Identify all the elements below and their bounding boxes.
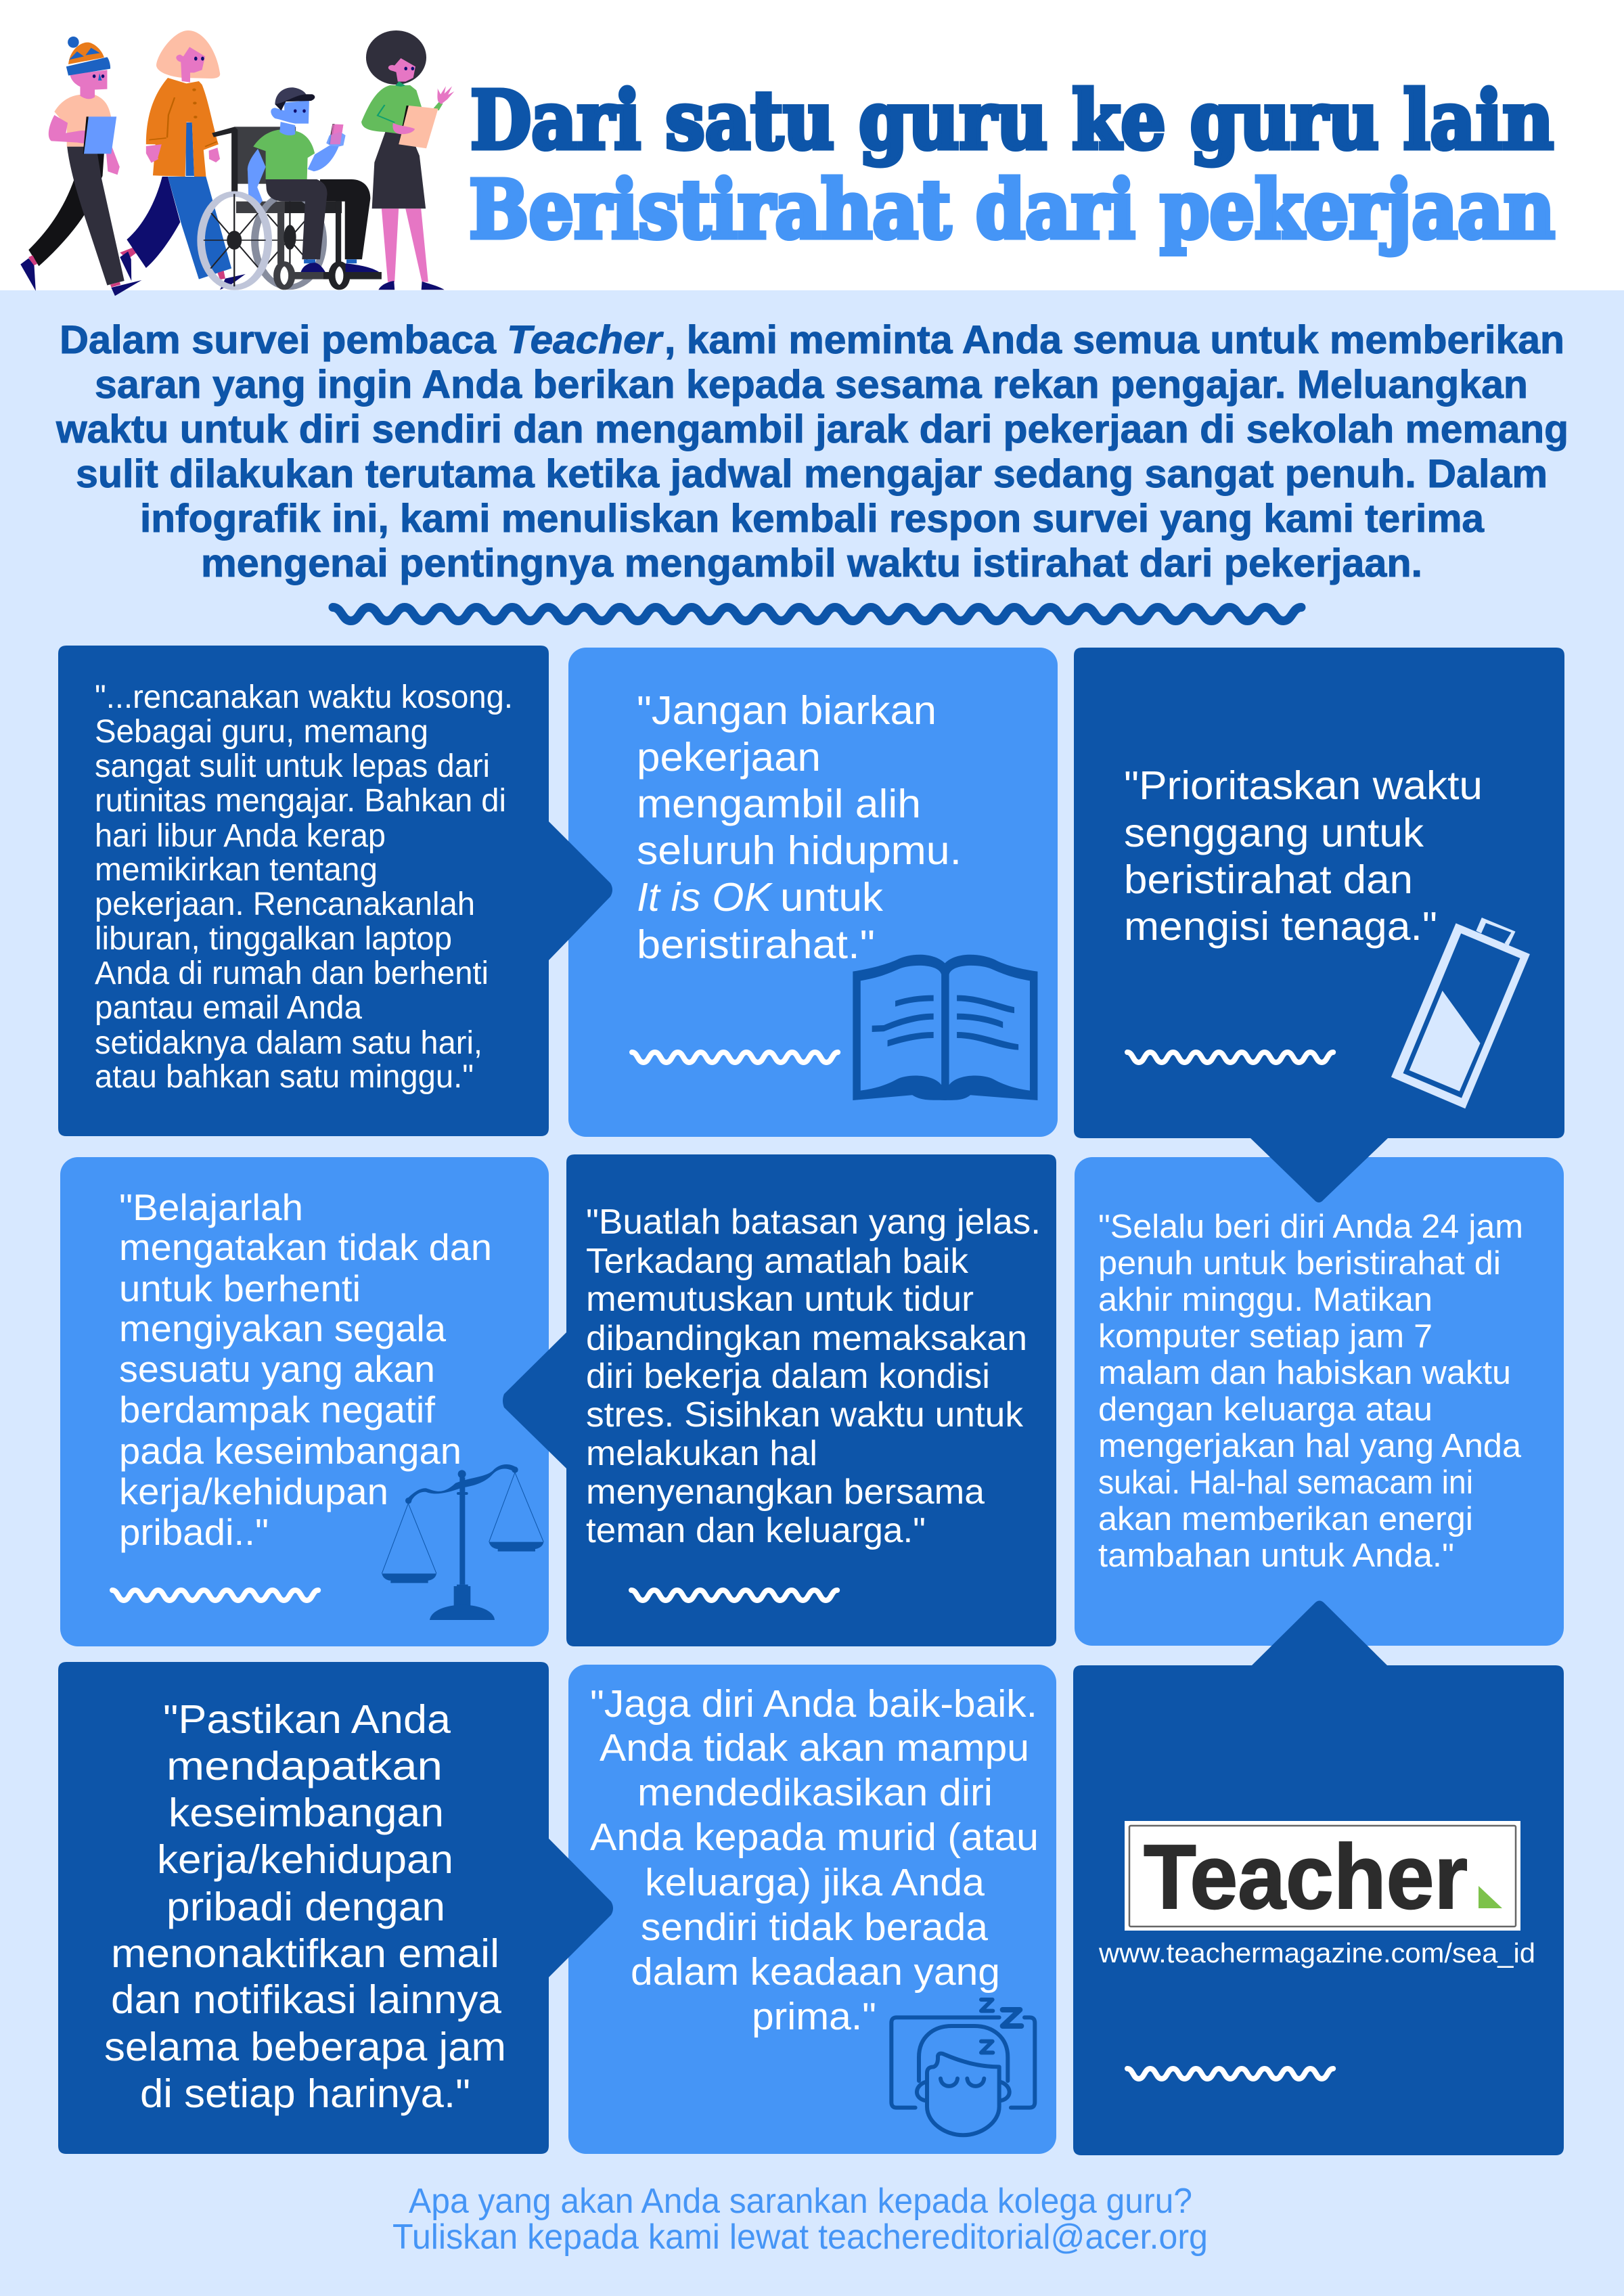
intro paragraph: mengenai pentingnya mengambil waktu istirahat dari pekerjaan. <box>201 541 1422 585</box>
quote text: mengerjakan hal yang Anda <box>1098 1428 1522 1464</box>
quote text: akhir minggu. Matikan <box>1098 1282 1433 1318</box>
quote text: pantau email Anda <box>95 990 362 1026</box>
quote text: "Jangan biarkan <box>637 688 937 733</box>
quote text: rutinitas mengajar. Bahkan di <box>95 783 506 819</box>
quote text: atau bahkan satu minggu." <box>95 1059 474 1095</box>
quote text: mengatakan tidak dan <box>119 1226 492 1268</box>
quote text: dalam keadaan yang <box>631 1950 1000 1994</box>
wave <box>1127 1052 1333 1062</box>
quote text: untuk berhenti <box>119 1267 361 1309</box>
quote text: "Prioritaskan waktu <box>1124 763 1483 808</box>
quote text: liburan, tinggalkan laptop <box>95 921 452 957</box>
quote text: hari libur Anda kerap <box>95 818 386 854</box>
panel: row 2 middle, set clear boundaries <box>503 1154 1056 1646</box>
quote text: dan notifikasi lainnya <box>111 1977 501 2022</box>
intro paragraph: waktu untuk diri sendiri dan mengambil jarak dari pekerjaan di sekolah memang <box>55 407 1569 451</box>
wave <box>1127 2069 1333 2079</box>
quote text: Terkadang amatlah baik <box>586 1242 969 1281</box>
figure: teacher with beanie and tablet <box>20 37 141 296</box>
quote text: sesuatu yang akan <box>119 1348 435 1390</box>
quote text: akan memberikan energi <box>1098 1501 1473 1537</box>
illustration: teachers walking and wheelchair user <box>20 30 454 296</box>
panel: row 1 right, prioritise free time <box>1074 648 1564 1202</box>
wave <box>112 1590 318 1600</box>
quote text: sendiri tidak berada <box>641 1906 988 1949</box>
wave <box>631 1590 837 1600</box>
quote text <box>1098 1209 1523 1574</box>
icon: balance scales <box>382 1464 543 1620</box>
quote text <box>586 1202 1041 1550</box>
quote text: setidaknya dalam satu hari, <box>95 1025 482 1061</box>
quote text: pekerjaan. Rencanakanlah <box>95 886 475 922</box>
quote text: pada keseimbangan <box>119 1430 461 1472</box>
intro paragraph: infografik ini, kami menuliskan kembali respon survei yang kami terima <box>140 497 1485 541</box>
quote text: Sebagai guru, memang <box>95 714 428 750</box>
wave divider <box>333 608 1301 621</box>
panel: row 1 left, plan free time <box>58 646 612 1136</box>
quote text: keluarga) jika Anda <box>645 1861 985 1904</box>
footer call to action: Tuliskan kepada kami lewat teachereditorial@acer.org <box>392 2218 1208 2257</box>
footer call to action: Apa yang akan Anda sarankan kepada kolega guru? <box>409 2182 1192 2221</box>
quote text: "Selalu beri diri Anda 24 jam <box>1098 1209 1523 1245</box>
figure: teacher with clipboard <box>361 30 454 290</box>
website url: www.teachermagazine.com/sea_id <box>1098 1937 1535 1968</box>
quote text: mengiyakan segala <box>119 1307 446 1349</box>
quote text: "Jaga diri Anda baik-baik. <box>590 1682 1037 1726</box>
quote text: penuh untuk beristirahat di <box>1098 1245 1501 1282</box>
quote text: diri bekerja dalam kondisi <box>586 1357 990 1396</box>
quote text: pribadi dengan <box>166 1885 445 1929</box>
quote text: untuk <box>780 875 884 920</box>
quote text: It is OK <box>637 875 773 920</box>
panel: row 2 left, learn to say no <box>60 1157 549 1646</box>
quote text <box>95 679 513 1095</box>
quote text: keseimbangan <box>168 1791 444 1835</box>
quote text: menonaktifkan email <box>111 1931 499 1976</box>
intro paragraph: sulit dilakukan terutama ketika jadwal mengajar sedang sangat penuh. Dalam <box>76 452 1548 496</box>
quote text: tambahan untuk Anda." <box>1098 1537 1454 1574</box>
intro paragraph: Dalam survei pembaca <box>60 318 497 362</box>
quote text: sukai. Hal-hal semacam ini <box>1098 1464 1473 1501</box>
quote text: beristirahat dan <box>1124 857 1413 902</box>
quote text: dengan keluarga atau <box>1098 1391 1433 1428</box>
quote text: memikirkan tentang <box>95 852 378 888</box>
quote text: mendapatkan <box>166 1744 443 1788</box>
quote text: stres. Sisihkan waktu untuk <box>586 1395 1024 1435</box>
quote text: mengambil alih <box>637 782 921 826</box>
quote text: "...rencanakan waktu kosong. <box>95 679 513 715</box>
quote text: "Pastikan Anda <box>163 1697 451 1742</box>
quote text: dibandingkan memaksakan <box>586 1319 1027 1358</box>
quote text: Anda di rumah dan berhenti <box>95 955 489 991</box>
quote text: selama beberapa jam <box>104 2025 506 2069</box>
icon: battery <box>1391 918 1530 1108</box>
quote text: Anda kepada murid (atau <box>590 1816 1039 1859</box>
quote text: prima." <box>752 1995 876 2038</box>
intro paragraph: saran yang ingin Anda berikan kepada sesama rekan pengajar. Meluangkan <box>95 363 1528 407</box>
quote text: seluruh hidupmu. <box>637 828 962 873</box>
panel: row 3 middle, take care of yourself <box>568 1665 1056 2154</box>
quote text: pekerjaan <box>637 735 821 780</box>
panel: row 2 right, give yourself 24 hours <box>1075 1157 1564 1646</box>
quote text: pribadi.." <box>119 1511 269 1553</box>
quote text: sangat sulit untuk lepas dari <box>95 748 490 784</box>
quote text: komputer setiap jam 7 <box>1098 1318 1433 1355</box>
icon: sleeping head <box>891 2000 1035 2135</box>
icon: open book <box>853 955 1037 1100</box>
quote text: menyenangkan bersama <box>586 1472 985 1512</box>
footer call to action <box>392 2182 1208 2257</box>
quote text: malam dan habiskan waktu <box>1098 1355 1511 1391</box>
quote text: melakukan hal <box>586 1434 817 1473</box>
panel: row 3 left, ensure work-life balance <box>58 1662 613 2154</box>
intro paragraph: Teacher <box>507 318 664 362</box>
quote text: di setiap harinya." <box>140 2071 470 2116</box>
panel: row 3 right, Teacher magazine <box>1073 1601 1564 2155</box>
figure: teacher with orange coat <box>120 30 246 290</box>
quote text <box>1124 763 1483 949</box>
quote text: memutuskan untuk tidur <box>586 1280 974 1319</box>
title <box>469 73 1555 256</box>
intro paragraph: , kami meminta Anda semua untuk memberikan <box>664 318 1564 362</box>
panel: row 1 middle, do not let work take over <box>568 648 1058 1137</box>
quote text <box>104 1697 506 2116</box>
quote text <box>637 688 962 967</box>
quote text: mengisi tenaga." <box>1124 904 1437 949</box>
quote text: "Buatlah batasan yang jelas. <box>586 1202 1041 1242</box>
quote text: mendedikasikan diri <box>637 1771 993 1814</box>
quote text <box>119 1186 492 1553</box>
logo: Teacher: Teacher <box>1144 1826 1468 1928</box>
quote text: kerja/kehidupan <box>157 1837 453 1882</box>
quote text: senggang untuk <box>1124 811 1424 855</box>
figure: wheelchair user <box>201 87 382 288</box>
quote text <box>590 1682 1039 2038</box>
quote text: berdampak negatif <box>119 1389 436 1431</box>
intro paragraph <box>55 318 1569 585</box>
quote text: teman dan keluarga." <box>586 1511 926 1550</box>
quote text: beristirahat." <box>637 922 875 967</box>
wave <box>632 1052 838 1062</box>
quote text: "Belajarlah <box>119 1186 303 1228</box>
quote text: Anda tidak akan mampu <box>600 1726 1029 1770</box>
quote text: kerja/kehidupan <box>119 1470 388 1512</box>
